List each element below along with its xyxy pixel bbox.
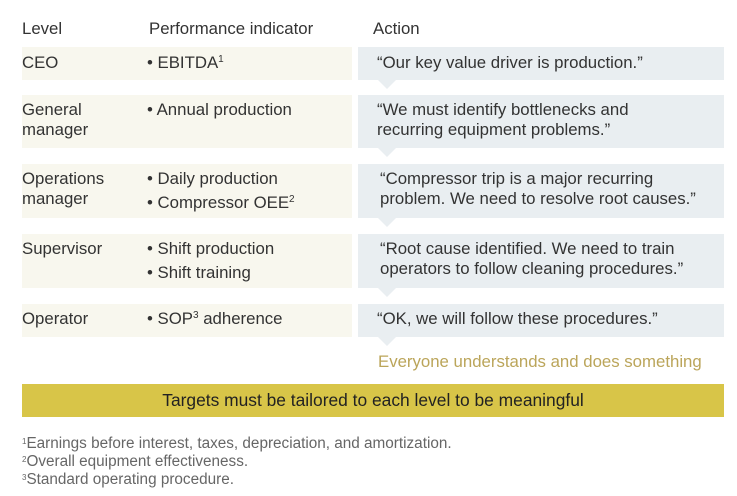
row: General manager: General [22,100,82,119]
row: Operations manager: problem. We need to resolve root causes.” [380,189,696,208]
row: Operations manager: • Daily production [147,169,278,188]
banner: Targets must be tailored to each level to be meaningful [162,390,584,410]
row: General manager: manager [22,120,88,139]
row: Supervisor [22,234,724,297]
row: CEO [22,47,724,89]
row: Operator [22,304,724,346]
header row: Performance indicator [149,19,313,38]
row: General manager [22,95,724,157]
row: Supervisor: Supervisor [22,239,102,258]
row: Operations manager: “Compressor trip is a major recurring [380,169,653,188]
row: Operator: Operator [22,309,88,328]
result text: Everyone understands and does something [378,352,702,371]
header row [22,19,420,38]
footnotes: 3Standard operating procedure. [22,471,234,488]
row: General manager: recurring equipment problems.” [377,120,610,139]
banner [22,384,724,417]
row: Operations manager: • Compressor OEE2 [147,193,295,212]
row: Operator: • SOP3 adherence [147,309,283,328]
row: Operations manager: manager [22,189,88,208]
row: Supervisor: “Root cause identified. We need to train [380,239,674,258]
footnotes: 1Earnings before interest, taxes, depreciation, and amortization. [22,435,452,452]
row: CEO: CEO [22,53,58,72]
footnotes: 2Overall equipment effectiveness. [22,453,248,470]
row: General manager: “We must identify bottlenecks and [377,100,629,119]
row: Operator: “OK, we will follow these procedures.” [377,309,658,328]
row: Supervisor: • Shift training [147,263,251,282]
row: Supervisor: operators to follow cleaning procedures.” [380,259,683,278]
row: Operations manager [22,164,724,227]
header row: Level [22,19,62,38]
row: CEO: “Our key value driver is production.” [377,53,643,72]
row: Operations manager: Operations [22,169,104,188]
row: CEO: • EBITDA1 [147,53,224,72]
row: Supervisor: • Shift production [147,239,274,258]
header row: Action [373,19,420,38]
footnotes [22,435,452,488]
row: General manager: • Annual production [147,100,292,119]
